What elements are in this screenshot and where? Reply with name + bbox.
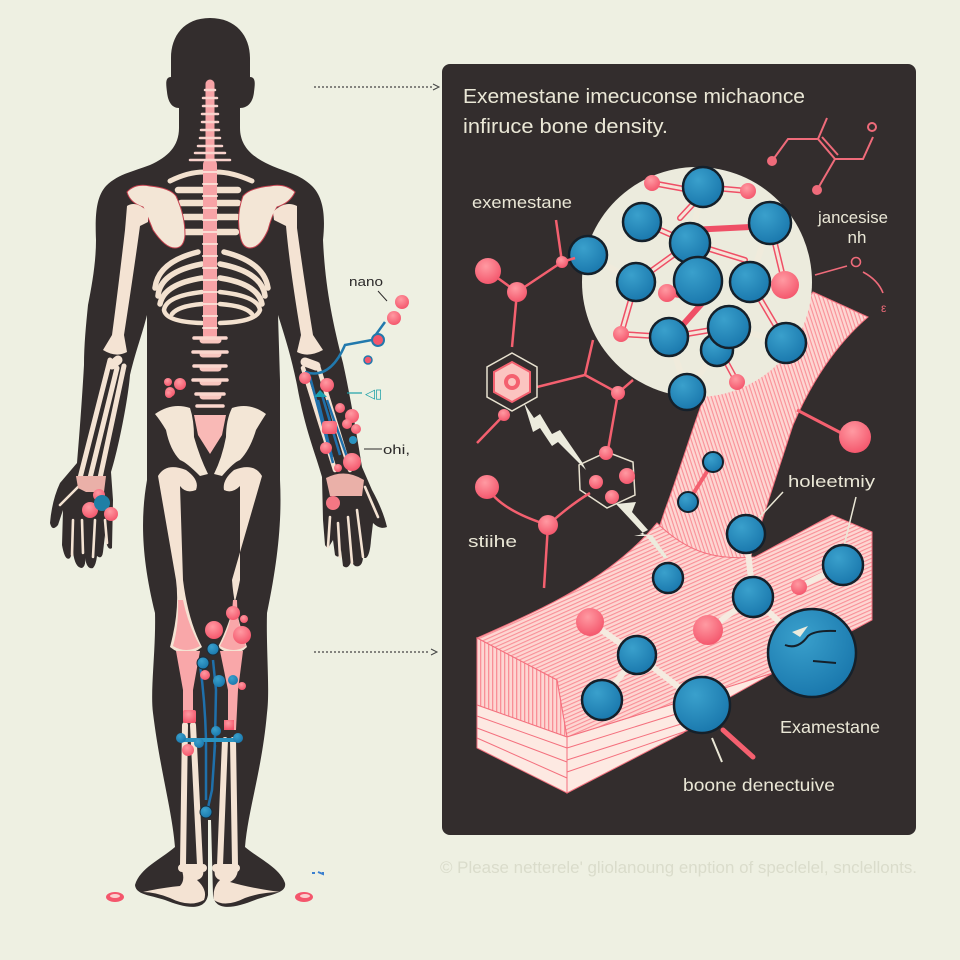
lightning upper: [524, 403, 586, 470]
label: jancesise: jancesise: [817, 208, 888, 227]
bone slab side: [477, 638, 567, 737]
dotted arrow upper: [314, 84, 439, 90]
spine: [190, 84, 230, 406]
molecule chain on right arm: [305, 322, 385, 373]
label: holeetmiy: holeetmiy: [788, 472, 876, 491]
label: exemestane: exemestane: [472, 193, 572, 212]
leg molecules: [176, 606, 251, 818]
label: Examestane: Examestane: [780, 717, 880, 737]
arm molecules: [82, 295, 409, 521]
scapula left: [127, 185, 185, 248]
feet: [143, 868, 205, 904]
title: Exemestane imecuconse michaonce: [463, 85, 805, 108]
bones left and right: [60, 84, 378, 904]
label: jancesise: nh: [848, 228, 866, 247]
label: ohi: ohi,: [383, 442, 410, 457]
pink atoms in circle: [613, 175, 799, 390]
label: nano: nano: [349, 274, 383, 289]
humerus left: [103, 204, 148, 355]
label: nano: [349, 274, 387, 301]
lightning lower: [616, 502, 668, 558]
label: jancesise: [817, 208, 888, 247]
skeleton: [60, 84, 378, 904]
label: teal glyph: [347, 386, 382, 401]
label: holeetmiy: [757, 472, 876, 550]
bonds in circle: [588, 183, 786, 392]
title: infiruce bone density.: [463, 115, 668, 138]
hexagon icon: [487, 353, 537, 411]
wrist carpals: [76, 473, 364, 496]
left hand markers: [82, 502, 98, 518]
footer note: © Please netterele' gliolanoung enption of speclelel, snclellonts.: [440, 859, 917, 877]
pink molecule top right: [768, 118, 876, 194]
femurs: [158, 467, 202, 654]
label: stiihe: stiihe: [468, 532, 517, 551]
large molecule on slab: [576, 515, 863, 762]
ribbon bone: [600, 292, 868, 620]
label: teal glyph: ◁▯: [365, 386, 382, 401]
title: [463, 85, 805, 138]
pink side molecule: ε: [881, 301, 887, 315]
pink atom right: [797, 410, 871, 453]
lower left molecule: [475, 475, 590, 588]
zoom circle: [582, 167, 812, 397]
scapula right: [239, 185, 295, 248]
humerus right: [273, 204, 323, 355]
body silhouette: [50, 18, 387, 907]
pink side molecule: [815, 258, 887, 315]
hand bones: [60, 487, 378, 563]
left molecule: [475, 220, 633, 450]
shins: [182, 725, 236, 868]
ribs: [155, 172, 268, 323]
lower hexagon cluster: [579, 446, 635, 508]
blue atoms in circle: [569, 167, 806, 410]
bone slab top: [477, 515, 872, 737]
bone slab front: [477, 673, 773, 793]
label: ohi: [364, 442, 410, 457]
panel: [442, 64, 916, 835]
femur and tibia pink hatch: [173, 600, 246, 650]
small molecule on ribbon: [678, 452, 723, 512]
floor markers: [106, 872, 323, 902]
label: boone denectuive: boone denectuive: [683, 775, 835, 795]
forearm bones: [80, 360, 350, 478]
dotted arrow lower: [314, 649, 437, 655]
pelvis: [155, 406, 208, 476]
